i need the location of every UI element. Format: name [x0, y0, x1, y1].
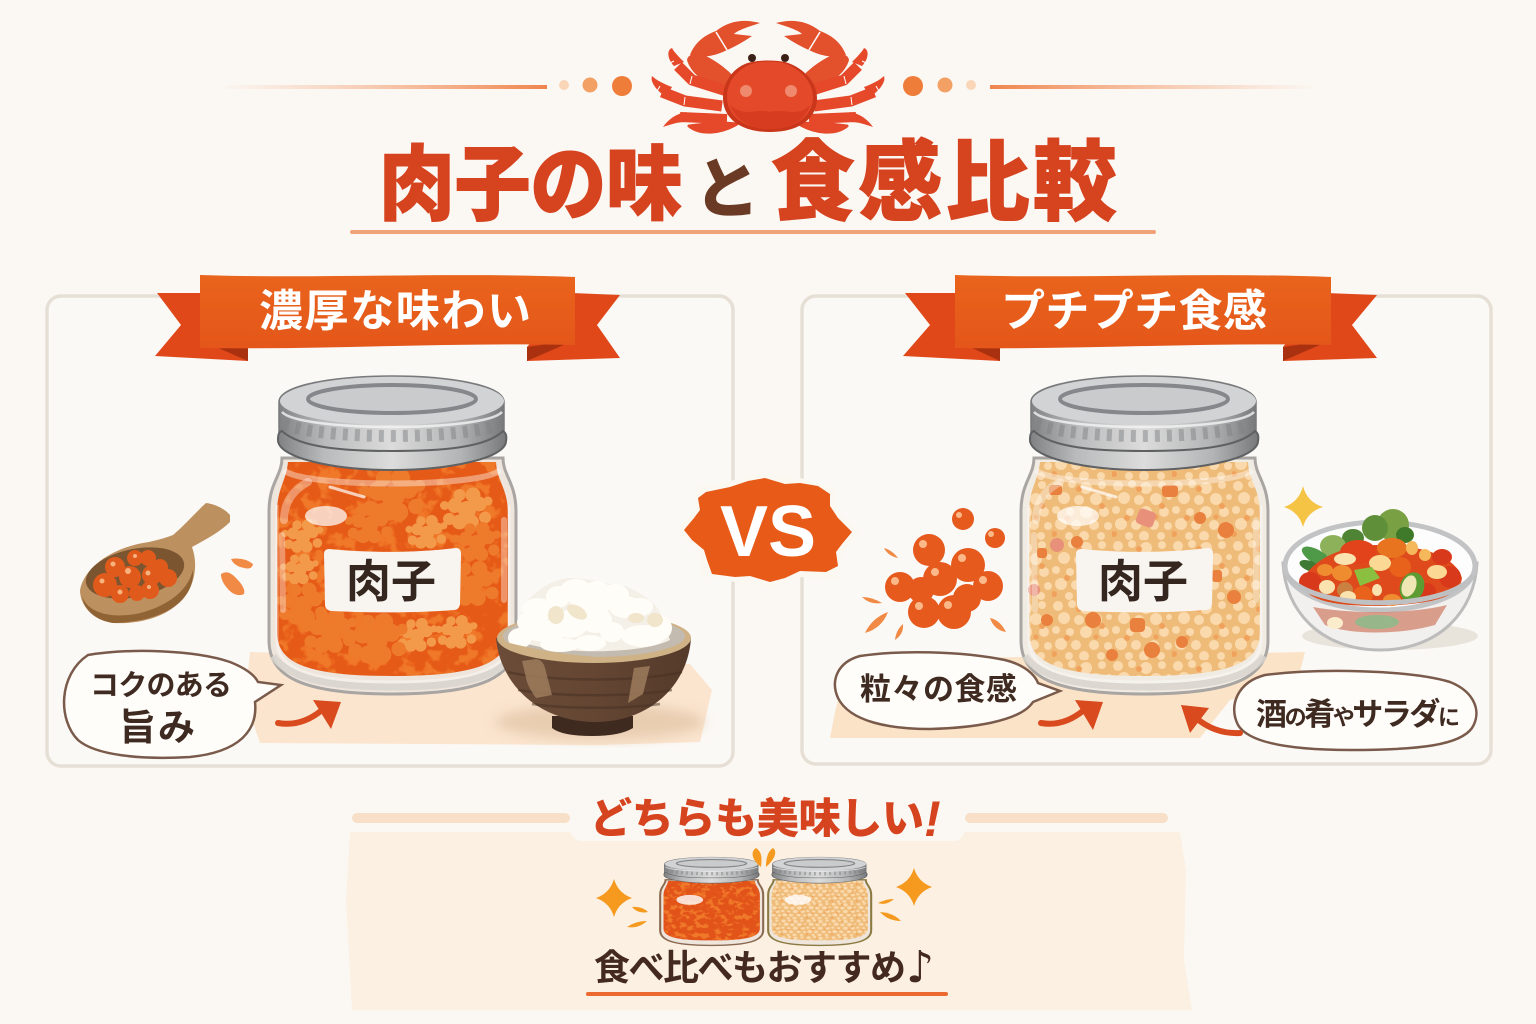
top ornament: right line and dots	[903, 76, 1322, 96]
ribbon: プチプチ食感: プチプチ食感	[1001, 287, 1267, 336]
title	[379, 135, 1117, 232]
callout: コクのある旨み: 旨み	[119, 707, 195, 748]
small jar: rich	[660, 857, 763, 945]
caption underline	[586, 992, 948, 996]
jar label	[324, 548, 461, 612]
bottom heading side rules	[352, 813, 1168, 823]
jar: rich roe	[269, 376, 516, 694]
ribbon: 濃厚な味わい	[155, 275, 620, 361]
bottom section band	[346, 832, 1192, 1010]
VS badge: VS	[720, 492, 816, 572]
title: 肉子の味	[379, 138, 682, 231]
panel frame left	[47, 296, 733, 766]
callout: コクのある旨み: コクのある	[90, 670, 232, 702]
callout: 酒の肴やサラダに	[1234, 671, 1476, 750]
jar label: 肉子	[346, 556, 436, 607]
arrow: pairing callout to jar	[1181, 705, 1240, 733]
bottom heading: !	[924, 791, 941, 847]
jar label	[1076, 548, 1213, 612]
callout: コクのある旨み	[64, 651, 281, 758]
icon: spark marks by spoon	[221, 559, 253, 595]
callout: 粒々の食感: 粒々の食感	[860, 672, 1017, 707]
callout: 酒の肴やサラダに: 酒の肴やサラダに	[1256, 697, 1460, 732]
table wash left	[245, 652, 712, 745]
panel frame right	[802, 296, 1491, 764]
icon: wooden spoon with roe	[80, 503, 230, 623]
icon: roe cluster	[862, 508, 1006, 640]
panel: rich flavor	[47, 275, 733, 766]
arrow: left callout to jar	[278, 700, 341, 729]
icon: sparkle	[1284, 486, 1323, 527]
jar: popping roe	[1021, 376, 1268, 694]
table wash right	[830, 652, 1305, 738]
bottom caption: ♪	[906, 942, 934, 993]
jar label: 肉子	[1098, 556, 1188, 607]
title underline	[350, 230, 1156, 234]
bottom caption: 食べ比べもおすすめ	[594, 947, 906, 988]
panel: popping texture	[802, 275, 1491, 764]
icon: salad in glass bowl	[1283, 509, 1478, 650]
arrow: texture callout to jar	[1041, 700, 1103, 730]
bottom heading: どちらも美味しい	[590, 795, 924, 842]
top ornament: left line and dots	[215, 76, 632, 96]
icon: sparkles and marks around small jars	[596, 848, 932, 927]
ribbon: 濃厚な味わい: 濃厚な味わい	[259, 287, 531, 336]
callout: 粒々の食感	[835, 652, 1060, 729]
ribbon: プチプチ食感	[903, 275, 1377, 361]
icon: rice bowl	[495, 578, 705, 740]
small jar: popping	[768, 857, 871, 945]
title: と	[694, 152, 760, 226]
icon: crab	[652, 21, 884, 132]
title: 食感比較	[771, 135, 1117, 232]
VS badge	[683, 477, 854, 584]
